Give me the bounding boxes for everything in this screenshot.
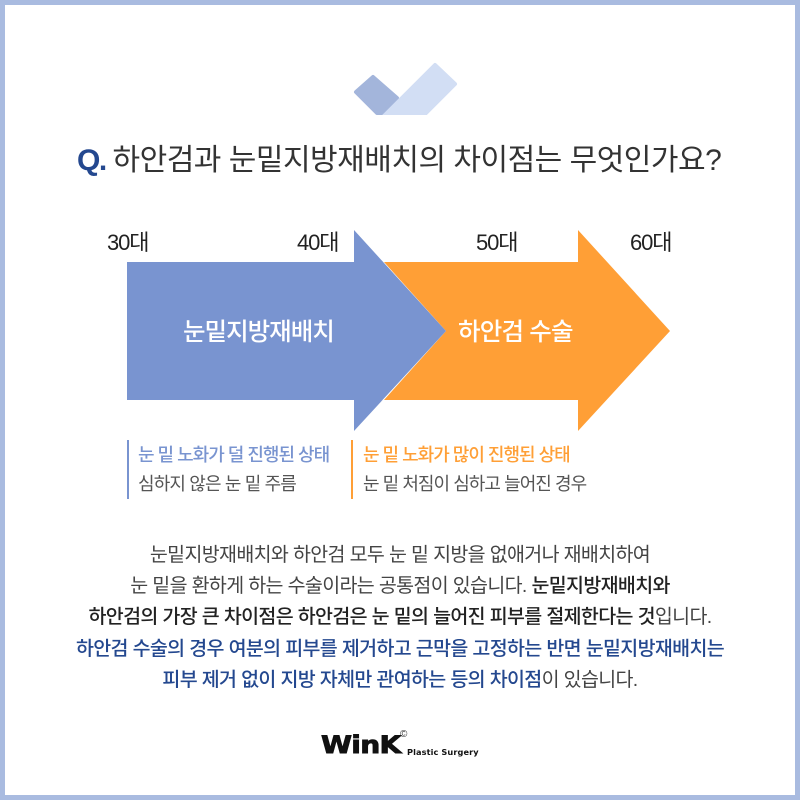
body text: 하안검의 가장 큰 차이점은 하안검은 눈 밑의 늘어진 피부를 절제한다는 것입니다. bbox=[88, 606, 712, 628]
logo: Wink Plastic Surgery: Plastic Surgery bbox=[407, 747, 479, 757]
body text bbox=[76, 544, 724, 691]
note: under-eye fat bbox=[127, 440, 337, 499]
chart: age timeline arrows bbox=[107, 230, 671, 431]
arrows bbox=[127, 230, 670, 431]
note: lower blepharoplasty: 눈 밑 처짐이 심하고 늘어진 경우 bbox=[363, 474, 586, 494]
logo: Wink Plastic Surgery: © bbox=[400, 729, 407, 740]
body text: 눈밑지방재배치와 하안검 모두 눈 밑 지방을 없애거나 재배치하여 bbox=[150, 544, 650, 566]
age labels: 50대 bbox=[476, 230, 517, 255]
logo: Wink Plastic Surgery bbox=[321, 729, 479, 759]
body text: 눈 밑을 환하게 하는 수술이라는 공통점이 있습니다. 눈밑지방재배치와 bbox=[130, 575, 670, 597]
note: under-eye fat: 심하지 않은 눈 밑 주름 bbox=[138, 474, 296, 494]
note: under-eye fat: 눈 밑 노화가 덜 진행된 상태 bbox=[138, 445, 329, 465]
arrow label: blue: 눈밑지방재배치 bbox=[183, 319, 334, 346]
body text: 하안검 수술의 경우 여분의 피부를 제거하고 근막을 고정하는 반면 눈밑지방재배치는 bbox=[76, 638, 724, 660]
arrow label: orange: 하안검 수술 bbox=[458, 319, 573, 346]
age labels bbox=[107, 230, 671, 255]
age labels: 60대 bbox=[630, 230, 671, 255]
title: Q. 하안검과 눈밑지방재배치의 차이점는 무엇인가요? bbox=[77, 144, 721, 177]
age labels: 30대 bbox=[107, 230, 148, 255]
logo: Wink Plastic Surgery: WinK bbox=[321, 731, 401, 759]
body text: 피부 제거 없이 지방 자체만 관여하는 등의 차이점이 있습니다. bbox=[162, 669, 638, 691]
note: lower blepharoplasty bbox=[351, 440, 591, 499]
age labels: 40대 bbox=[297, 230, 338, 255]
note: lower blepharoplasty: 눈 밑 노화가 많이 진행된 상태 bbox=[363, 445, 570, 465]
icon: check mark bbox=[354, 63, 457, 115]
